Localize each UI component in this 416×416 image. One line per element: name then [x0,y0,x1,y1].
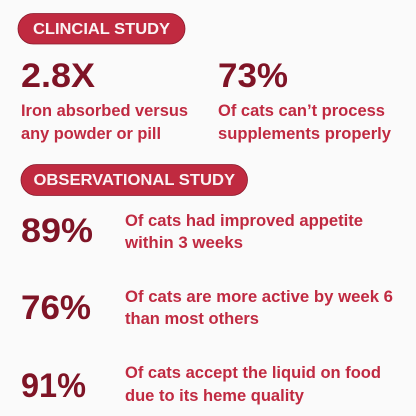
stat: 73% cannot process supplements: supplements properly [218,124,392,143]
stat: 2.8X iron absorbed: any powder or pill [21,124,161,143]
stat: 91% accept the liquid: due to its heme quality [125,386,305,405]
stat: 76% more active: Of cats are more active by week 6 [125,287,393,306]
stat: 76% more active [21,287,393,328]
heading: observational study [21,164,248,196]
heading: clinical study: CLINCIAL STUDY [33,21,170,38]
stat: 76% more active: 76% [21,289,91,327]
stat: 91% accept the liquid: 91% [21,367,86,405]
stat: 2.8X iron absorbed: Iron absorbed versus [21,101,188,120]
stat: 73% cannot process supplements: 73% [218,57,288,95]
stat: 2.8X iron absorbed: 2.8X [21,57,95,95]
stat: 73% cannot process supplements [218,57,392,143]
stat: 89% improved appetite: 89% [21,212,93,250]
stat: 76% more active: than most others [125,309,259,328]
stat: 73% cannot process supplements: Of cats can’t process [218,101,385,120]
stat: 89% improved appetite: within 3 weeks [124,233,243,252]
stat: 89% improved appetite: Of cats had improved appetite [125,211,363,230]
stat: 91% accept the liquid [21,363,381,405]
heading: clinical study [18,14,185,44]
stat: 91% accept the liquid: Of cats accept the liquid on food [125,363,381,382]
stat: 89% improved appetite [21,211,363,252]
stat: 2.8X iron absorbed [21,57,188,143]
heading: observational study: OBSERVATIONAL STUDY [34,172,235,189]
